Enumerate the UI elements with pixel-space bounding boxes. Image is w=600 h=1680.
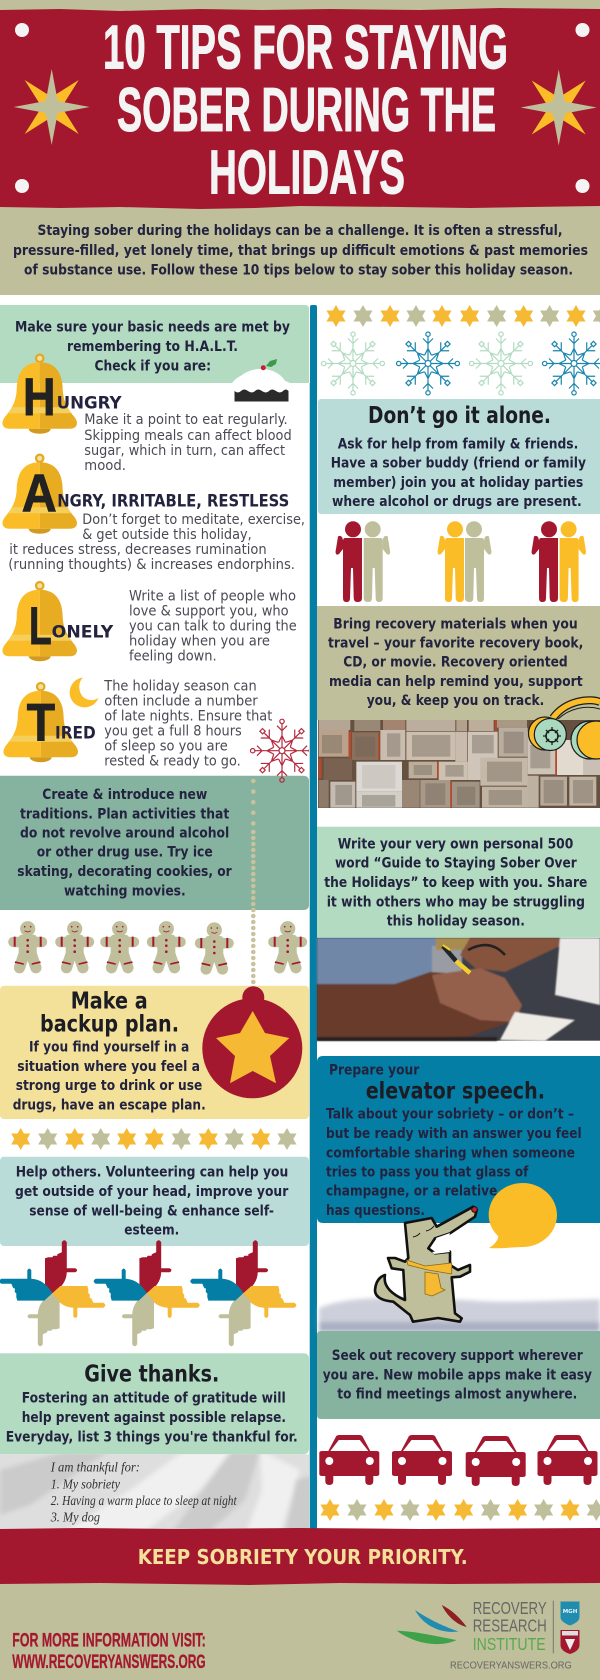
panel: new traditions: skating, decorating cookies, or <box>17 864 232 880</box>
panel: help others: esteem. <box>124 1222 179 1238</box>
description: of sleep so you are <box>104 739 228 755</box>
note text: I am thankful for: <box>50 1461 140 1476</box>
heading UNGRY: UNGRY <box>57 393 122 413</box>
panel: personal guide: this holiday season. <box>387 913 525 929</box>
note text: 3. My dog <box>50 1511 100 1526</box>
panel: H.A.L.T. intro <box>0 305 309 383</box>
body: Everyday, list 3 things you're thankful for. <box>6 1429 298 1445</box>
icon: speech bubble <box>489 1183 557 1248</box>
panel: new traditions: do not revolve around alcohol <box>20 825 229 841</box>
description <box>103 679 273 770</box>
heading <box>40 988 179 1038</box>
body <box>6 1391 298 1445</box>
star row: right bottom <box>320 1499 600 1521</box>
call to visit: FOR MORE INFORMATION VISIT: <box>12 1631 206 1652</box>
description: & get outside this holiday, <box>82 527 252 543</box>
panel: personal guide <box>317 827 600 938</box>
icon: left star <box>14 69 90 145</box>
Harvard shield <box>560 1630 580 1654</box>
call to visit <box>12 1631 206 1673</box>
description: of late nights. Ensure that <box>104 709 273 725</box>
logo wordmark: INSTITUTE <box>473 1634 546 1654</box>
title <box>103 14 508 208</box>
description: often include a number <box>104 694 258 710</box>
panel: help others: Help others. Volunteering can help you <box>16 1165 288 1181</box>
description: Don’t forget to meditate, exercise, <box>82 512 305 528</box>
note text <box>50 1461 238 1526</box>
body: tries to pass you that glass of <box>326 1165 529 1181</box>
body: champagne, or a relative <box>326 1184 497 1200</box>
panel: give thanks <box>0 1353 309 1454</box>
heading: Give thanks. <box>84 1362 219 1388</box>
logo leaves <box>397 1605 467 1644</box>
description: love & support you, who <box>129 604 289 620</box>
column divider bar <box>309 305 317 1529</box>
body: has questions. <box>326 1203 425 1219</box>
panel: new traditions: traditions. Plan activities that <box>20 806 229 822</box>
panel: new traditions: Create & introduce new <box>42 787 207 803</box>
heading ONELY: ONELY <box>52 622 114 642</box>
logo wordmark: RECOVERY <box>473 1598 547 1618</box>
body: Fostering an attitude of gratitude will <box>22 1391 286 1407</box>
photo: hand writing <box>317 938 600 1041</box>
call to visit: WWW.RECOVERYANSWERS.ORG <box>12 1652 206 1673</box>
icon: red snowflake <box>250 719 314 782</box>
photo: open books collage <box>318 720 600 808</box>
description <box>8 512 305 573</box>
description: sugar, which in turn, can affect <box>84 443 285 459</box>
snowflake row <box>322 332 600 395</box>
note text: 1. My sobriety <box>51 1477 121 1492</box>
description: holiday when you are <box>129 634 270 650</box>
letter T: T <box>27 694 55 753</box>
body <box>331 436 586 510</box>
description: The holiday season can <box>103 679 257 695</box>
body: situation where you feel a <box>17 1059 200 1075</box>
body <box>326 1107 582 1219</box>
panel: don't go it alone <box>318 399 600 514</box>
heading: backup plan. <box>40 1012 179 1038</box>
icon: moon <box>70 678 98 707</box>
icons: people pairs <box>336 521 586 602</box>
panel: elevator speech <box>317 1056 600 1223</box>
panel: new traditions: watching movies. <box>64 883 186 899</box>
description: mood. <box>84 458 126 474</box>
description: Write a list of people who <box>129 589 296 605</box>
heading NGRY: NGRY, IRRITABLE, RESTLESS <box>57 492 289 512</box>
panel: backup plan <box>0 986 309 1119</box>
description: feeling down. <box>129 649 217 665</box>
logo url: RECOVERYANSWERS.ORG <box>450 1659 572 1671</box>
description: you get a full 8 hours <box>104 724 242 740</box>
description: you can talk to during the <box>129 619 297 635</box>
icon: ornament <box>202 986 302 1098</box>
panel: seek support <box>317 1331 600 1419</box>
eyebrow: Prepare your <box>329 1062 420 1078</box>
icons: hands <box>0 1240 296 1346</box>
description: it reduces stress, decreases rumination <box>9 542 267 558</box>
star row: right top <box>326 305 600 327</box>
heading: Make a <box>71 988 148 1014</box>
ornament string <box>251 781 256 985</box>
logo: Recovery Research Institute <box>397 1598 580 1671</box>
description: Make it a point to eat regularly. <box>84 412 288 428</box>
description: (running thoughts) & increases endorphins. <box>8 557 295 573</box>
letter A: A <box>22 465 57 524</box>
tip: Tired <box>3 678 273 770</box>
description: Skipping meals can affect blood <box>84 428 292 444</box>
closing banner <box>0 1528 600 1585</box>
MGH shield <box>560 1602 580 1626</box>
description <box>84 412 292 474</box>
intro text <box>13 223 588 279</box>
letter L: L <box>29 597 52 656</box>
icons: cars <box>319 1435 598 1486</box>
tip: Hungry <box>2 355 292 474</box>
note text: 2. Having a warm place to sleep at night <box>51 1494 238 1509</box>
panel: new traditions: or other drug use. Try ice <box>37 845 213 861</box>
footer beige panel <box>0 1582 600 1680</box>
gingerbread row <box>8 921 307 975</box>
letter H: H <box>23 368 56 427</box>
top beige strip <box>0 0 600 12</box>
panel: new traditions <box>0 776 309 910</box>
tip: Lonely <box>2 582 297 665</box>
star row: left <box>11 1128 297 1150</box>
panel: help others <box>0 1157 309 1246</box>
intro panel <box>0 205 600 295</box>
heading: elevator speech. <box>366 1078 545 1104</box>
tip: Angry <box>2 455 305 573</box>
panel: recovery materials: you, & keep you on track. <box>367 693 544 709</box>
closing banner: KEEP SOBRIETY YOUR PRIORITY. <box>138 1545 468 1569</box>
panel: H.A.L.T. intro: Make sure your basic needs are met by <box>15 320 290 336</box>
MGH shield: MGH <box>563 1609 578 1615</box>
panel: H.A.L.T. intro: remembering to H.A.L.T. <box>67 339 238 355</box>
heading: Don’t go it alone. <box>368 403 551 429</box>
description: rested & ready to go. <box>104 754 241 770</box>
body <box>13 1040 206 1113</box>
icon: bell L <box>2 582 77 661</box>
panel: help others: get outside of your head, improve your <box>15 1184 289 1200</box>
icon: pudding <box>234 359 288 402</box>
illustration: wolf with scarf <box>375 1207 477 1322</box>
body: drugs, have an escape plan. <box>13 1097 206 1113</box>
panel: thankful note paper <box>0 1454 309 1529</box>
logo wordmark <box>473 1598 547 1654</box>
panel: H.A.L.T. intro: Check if you are: <box>94 359 211 375</box>
icon: bell T <box>3 683 78 762</box>
banner dots <box>15 23 590 193</box>
panel: help others: sense of well-being & enhance self- <box>29 1203 274 1219</box>
icon: right star <box>521 70 597 146</box>
icon: headphones <box>528 700 600 759</box>
body: help prevent against possible relapse. <box>22 1410 286 1426</box>
title banner <box>0 8 600 209</box>
panel: recovery materials <box>317 606 600 720</box>
title: HOLIDAYS <box>209 138 405 208</box>
body: If you find yourself in a <box>29 1040 189 1056</box>
icon: bell H <box>2 355 77 434</box>
body: strong urge to drink or use <box>16 1078 202 1094</box>
icon: bell A <box>2 455 77 534</box>
description <box>129 589 297 665</box>
heading IRED: IRED <box>55 723 96 743</box>
snowy ground <box>319 1298 600 1332</box>
logo wordmark: RESEARCH <box>473 1616 547 1636</box>
